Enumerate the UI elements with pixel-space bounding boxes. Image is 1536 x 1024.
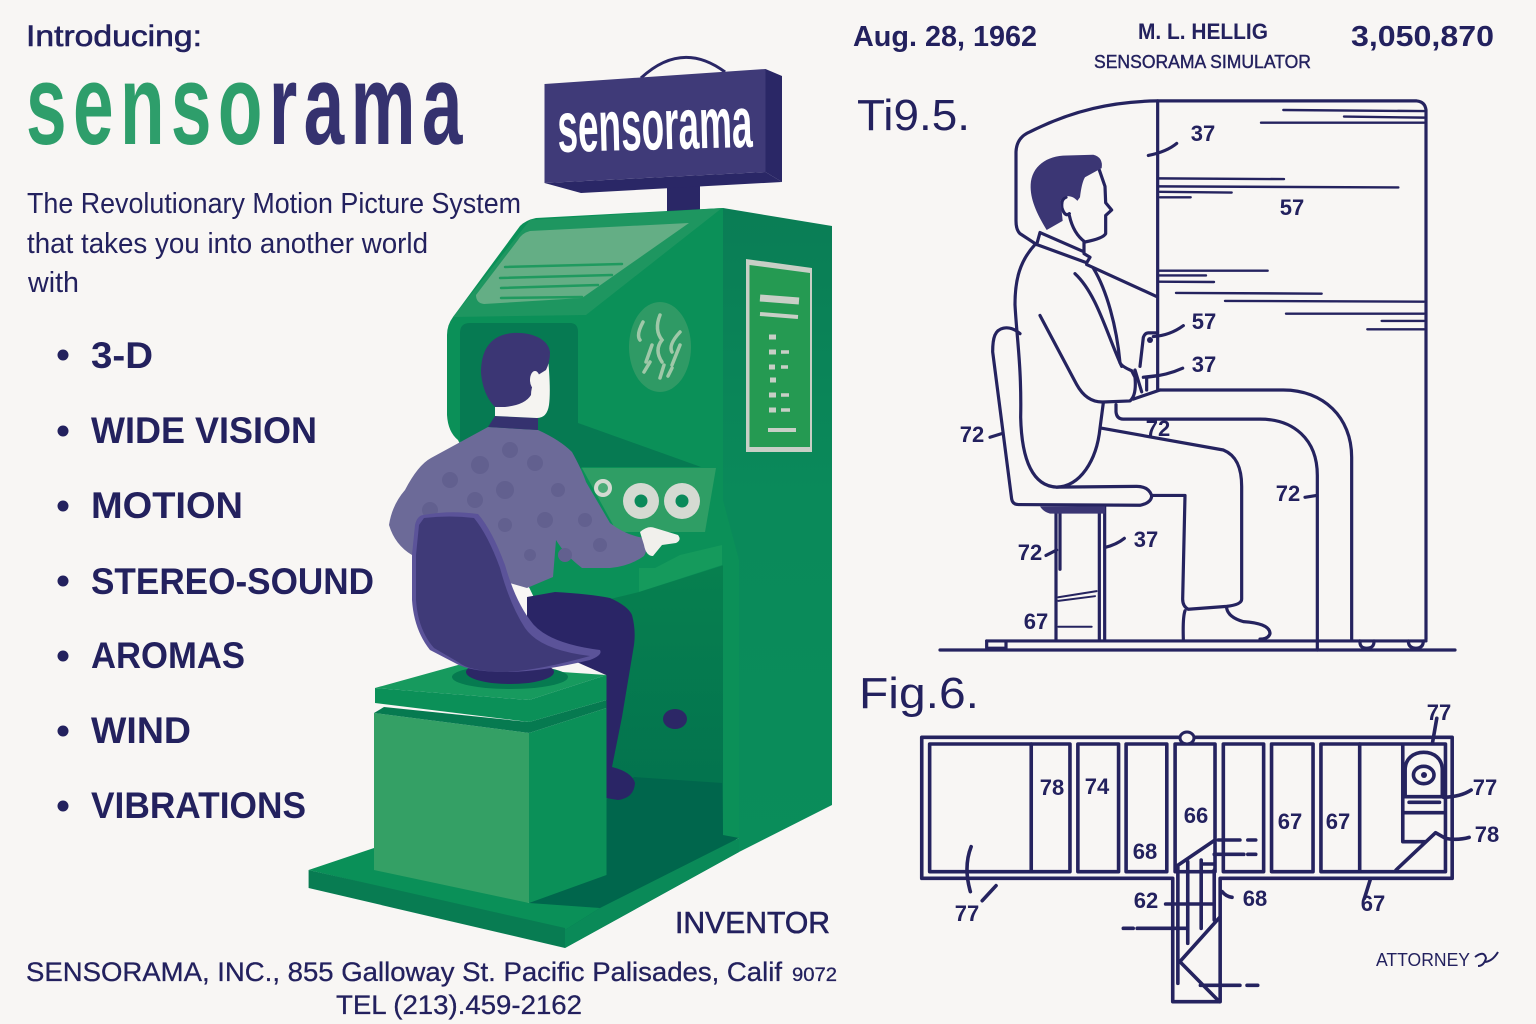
patent header: M. L. HELLIG: [1138, 19, 1268, 44]
top pivot circle: [1180, 732, 1194, 744]
company address: TEL (213).459-2162: [336, 990, 582, 1020]
chair shell: [412, 512, 601, 672]
figure 5 reference numbers: 72: [960, 422, 984, 447]
figure 6 reference numbers: 68: [1133, 839, 1157, 864]
figure 6 reference numbers: 77: [1427, 700, 1451, 725]
user's leg: [527, 592, 635, 800]
figure 5 patent drawing: [940, 101, 1455, 650]
feature list: STEREO-SOUND: [91, 561, 374, 602]
lower front strip: [723, 500, 739, 838]
feature list: MOTION: [91, 485, 243, 526]
booth and seated figure linework: [940, 101, 1455, 650]
user's hair: [481, 333, 550, 407]
company address: [26, 957, 837, 1020]
figure 6 reference numbers: 77: [1473, 775, 1497, 800]
figure 5 reference numbers: 37: [1191, 121, 1215, 146]
figure 5 reference numbers: [960, 121, 1304, 634]
figure 6 reference numbers: 77: [955, 901, 979, 926]
user's ear: [530, 371, 540, 389]
patent header: 3,050,870: [1351, 21, 1494, 53]
figure 5 heading: Ti9.5.: [857, 91, 970, 140]
chair shell inner: [416, 516, 590, 672]
inventor label: INVENTOR: [675, 905, 830, 940]
user's hand: [640, 527, 680, 556]
patent header: SENSORAMA SIMULATOR: [1094, 52, 1311, 72]
sensorama logo title: sensorama: [26, 42, 469, 169]
tagline text: that takes you into another world: [27, 228, 428, 260]
floor plan linework: [922, 718, 1471, 1002]
lower recess: [529, 565, 739, 948]
marquee sign: [544, 57, 782, 214]
figure 5 reference numbers: 72: [1276, 481, 1300, 506]
panel foot button: [663, 709, 687, 729]
floor shadow: [529, 777, 739, 908]
figure 6 reference numbers: 78: [1475, 822, 1499, 847]
figure 6 reference numbers: 67: [1326, 809, 1350, 834]
user's collar: [488, 416, 538, 430]
lens dot: [1421, 772, 1427, 778]
introducing label: Introducing:: [26, 20, 202, 53]
feature list: [58, 335, 374, 826]
cabinet front: [447, 208, 723, 610]
figure 5 reference numbers: 67: [1024, 609, 1048, 634]
tagline text: with: [27, 267, 79, 299]
figure 6 reference numbers: 68: [1243, 886, 1267, 911]
vent lines: [500, 264, 622, 298]
control console: [582, 468, 722, 592]
figure 5 reference numbers: 37: [1134, 527, 1158, 552]
cabinet side: [723, 208, 832, 852]
figure 6 reference numbers: 67: [1361, 891, 1385, 916]
company address: 9072: [792, 965, 837, 986]
round speaker grille: [629, 302, 691, 392]
user's neck and face: [495, 358, 550, 418]
glass screen: [476, 223, 689, 304]
tagline text: The Revolutionary Motion Picture System: [27, 188, 521, 220]
figure 5 reference numbers: 57: [1192, 309, 1216, 334]
feature list: WIND: [91, 710, 191, 751]
figure 6 reference numbers: 67: [1278, 809, 1302, 834]
figure 6 reference numbers: 62: [1134, 888, 1158, 913]
figure 5 reference numbers: 57: [1280, 195, 1304, 220]
seat pedestal: [374, 660, 606, 903]
slanted top panel: [453, 208, 722, 317]
figure 6 reference numbers: [955, 700, 1499, 926]
figure 6 heading: Fig.6.: [859, 669, 979, 718]
viewing recess: [460, 323, 701, 560]
feature list: WIDE VISION: [91, 410, 317, 451]
marquee sign: sensorama: [556, 83, 754, 168]
feature list: AROMAS: [91, 635, 245, 676]
figure 6 reference numbers: 74: [1085, 774, 1110, 799]
feature list: 3-D: [91, 335, 153, 376]
feature list: VIBRATIONS: [91, 785, 306, 826]
side instruction panel: [746, 259, 812, 452]
company address: SENSORAMA, INC., 855 Galloway St. Pacific Palisades, Calif: [26, 957, 783, 987]
figure 6 reference numbers: 78: [1040, 775, 1064, 800]
patent header: [853, 19, 1494, 72]
patent header: Aug. 28, 1962: [853, 21, 1037, 53]
figure 5 reference numbers: 37: [1192, 352, 1216, 377]
user's jacket: [389, 427, 647, 588]
figure 5 reference numbers: 72: [1018, 540, 1042, 565]
attorney signature: ATTORNEY: [1376, 950, 1470, 970]
base platform: [309, 838, 739, 948]
figure 5 reference numbers: 72: [1146, 416, 1170, 441]
seat hub: [1040, 506, 1105, 514]
figure 6 patent drawing: [922, 700, 1499, 1002]
tagline text: [27, 188, 521, 299]
dot on grip: [1147, 337, 1153, 343]
illustration: sensorama machine with seated user: [309, 57, 832, 948]
figure hair: [1031, 155, 1102, 230]
figure 6 reference numbers: 66: [1184, 803, 1208, 828]
